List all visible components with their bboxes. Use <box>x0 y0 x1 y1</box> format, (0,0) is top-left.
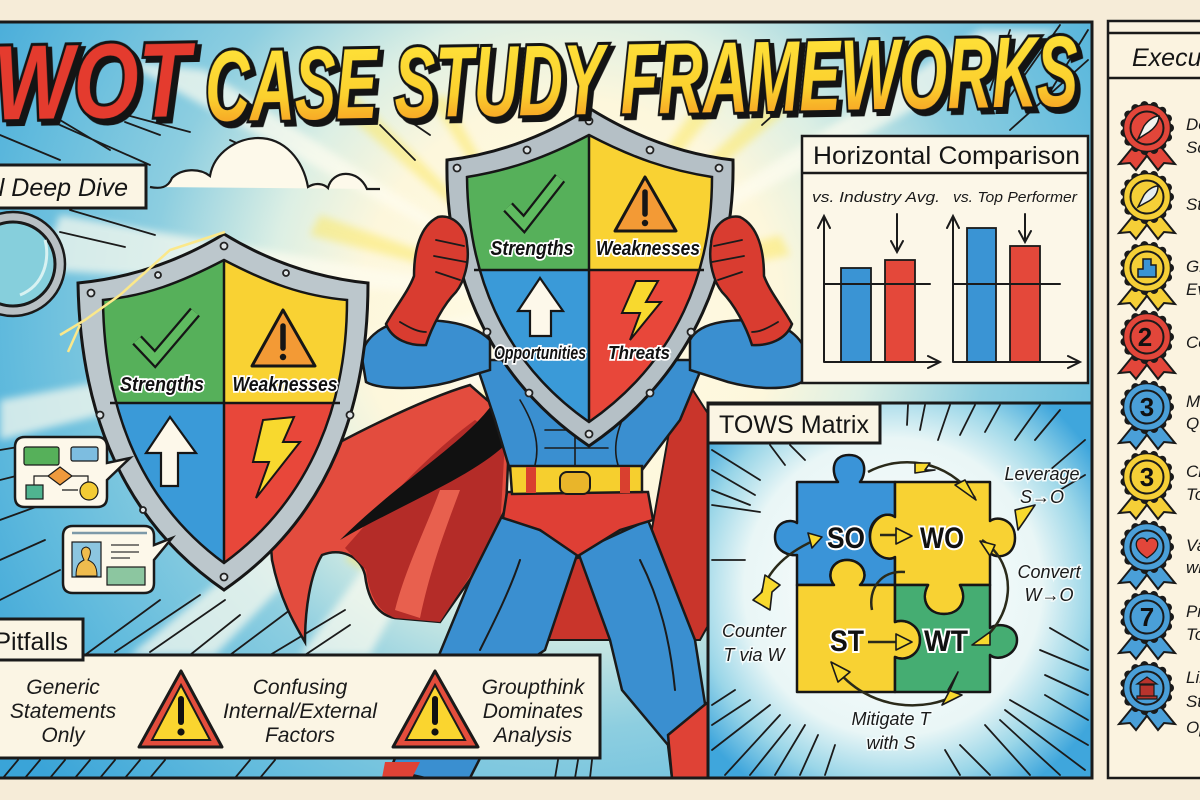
puzzle piece SO <box>775 455 895 585</box>
puzzle piece WO <box>870 482 1015 614</box>
quadrant labels: Opportunities <box>494 343 586 363</box>
medal 7 <box>1119 524 1175 589</box>
tows notes <box>722 464 1082 753</box>
tab: pitfalls <box>0 619 83 660</box>
flowchart callout <box>15 437 130 507</box>
cloud <box>150 138 380 189</box>
tows notes: T via W <box>724 645 787 665</box>
panel: executive checklist <box>1108 21 1200 778</box>
quadrant labels: Weaknesses <box>596 238 700 260</box>
panel: pitfalls <box>0 619 600 758</box>
puzzle piece WT <box>895 585 1017 692</box>
medal 2 <box>1119 174 1175 239</box>
icon: warning <box>615 177 676 231</box>
tows notes: Counter <box>722 621 787 641</box>
quadrant labels: Strengths <box>490 238 574 260</box>
icon: warning 1 <box>139 671 222 747</box>
icon: check <box>508 178 560 224</box>
text: generic statements: Generic <box>26 676 100 699</box>
icon: warning <box>252 310 315 366</box>
large shield <box>447 108 733 446</box>
medal 9 <box>1119 664 1175 730</box>
heading: Horizontal Comparison <box>813 142 1080 170</box>
belt <box>510 466 642 494</box>
medal 5: 3 <box>1140 392 1154 422</box>
icon: warning 2 <box>393 671 478 747</box>
medal 8 <box>1119 594 1175 659</box>
medal 6: 3 <box>1140 462 1154 492</box>
cape left <box>271 385 510 642</box>
matrix labels <box>827 522 968 658</box>
glow <box>60 232 225 352</box>
icon: lightning <box>622 281 661 340</box>
cape back <box>549 390 706 641</box>
gloves <box>386 217 792 345</box>
panel: tows matrix <box>708 403 1094 779</box>
icon: check <box>137 312 195 359</box>
medal 8: 7 <box>1140 602 1154 632</box>
text: confusing factors: Confusing <box>253 676 348 699</box>
tows notes: with S <box>866 733 916 753</box>
quadrant labels <box>490 238 700 363</box>
medal 6 <box>1119 454 1175 519</box>
matrix labels: SO <box>827 522 865 555</box>
torso <box>475 360 705 470</box>
medal 3 <box>1119 244 1175 310</box>
icon: up arrow <box>146 417 196 486</box>
chart: vs top performer <box>947 214 1080 368</box>
medal 1 <box>1119 104 1175 170</box>
puzzle piece ST <box>797 560 920 692</box>
arms <box>362 320 806 388</box>
icon: up arrow <box>518 278 563 336</box>
puzzle <box>775 455 1017 692</box>
subheads: vs. Top Performer <box>953 189 1078 206</box>
tab <box>708 404 880 443</box>
text: groupthink: Dominates <box>483 700 584 723</box>
labels <box>120 374 338 396</box>
tows notes: Convert <box>1017 562 1082 582</box>
medal 5 <box>1119 384 1175 449</box>
profile callout <box>63 526 172 593</box>
tows notes: Leverage <box>1004 464 1080 484</box>
red boots <box>668 702 708 778</box>
tows notes: W→O <box>1024 585 1074 605</box>
tab: TOWS Matrix <box>719 411 869 439</box>
matrix labels: WT <box>924 625 968 658</box>
text: groupthink: Analysis <box>492 724 573 747</box>
tows notes: S→O <box>1020 487 1064 507</box>
labels: Weaknesses <box>232 374 338 396</box>
panel: horizontal comparison <box>802 136 1088 383</box>
text: groupthink: Groupthink <box>482 676 586 699</box>
trunks <box>503 492 653 556</box>
medal 4 <box>1119 314 1175 379</box>
subheads: vs. Industry Avg. <box>812 189 940 206</box>
magnifying glass <box>0 212 65 316</box>
quadrant labels: Threats <box>608 343 670 363</box>
tows notes: Mitigate T <box>851 709 933 729</box>
arrowheads and bolts <box>753 463 1035 705</box>
small shield <box>60 232 368 590</box>
tab: deep dive <box>0 165 146 208</box>
medal 4: 2 <box>1138 322 1152 352</box>
text: confusing factors: Factors <box>265 724 336 747</box>
rivets <box>88 242 354 580</box>
labels: Strengths <box>120 374 204 396</box>
matrix labels: ST <box>830 625 864 658</box>
cycle arrows <box>760 462 1008 705</box>
chart: vs industry <box>818 214 940 368</box>
matrix labels: WO <box>920 522 964 555</box>
text: confusing factors: Internal/External <box>223 700 378 723</box>
hero <box>271 320 806 778</box>
text: generic statements: Statements <box>10 700 117 723</box>
shield rivets <box>454 118 722 438</box>
subheads <box>812 189 1078 206</box>
text: generic statements: Only <box>41 724 86 747</box>
legs <box>390 510 706 778</box>
icon: lightning <box>253 417 300 498</box>
